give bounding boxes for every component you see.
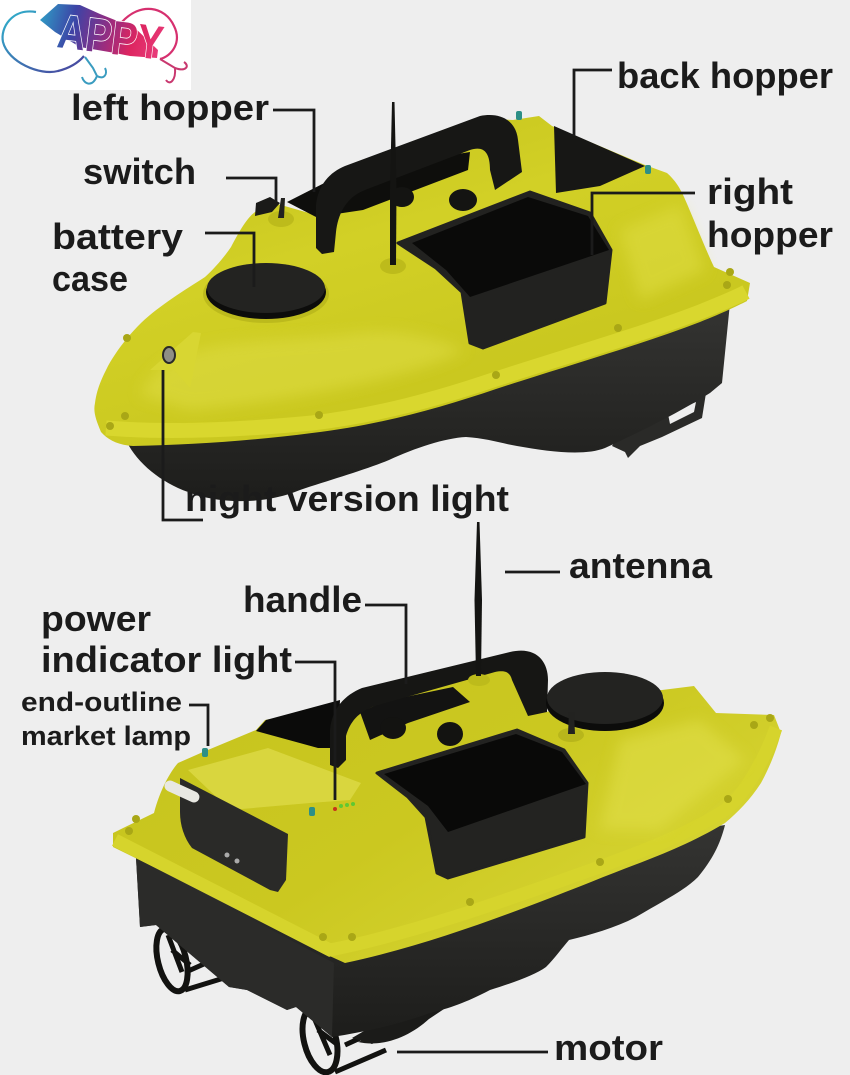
label: right hopper: hopper <box>707 214 833 255</box>
logo: lure body <box>40 4 158 58</box>
label: power indicator light: indicator light <box>41 639 292 680</box>
bottom boat: left hopper <box>256 700 340 748</box>
label: power indicator light: power <box>41 598 151 639</box>
bottom boat: hull <box>136 825 725 1037</box>
label: battery case: case <box>52 258 128 299</box>
bottom boat: switch <box>558 712 584 742</box>
label: left hopper: left hopper <box>71 87 269 128</box>
label: power indicator light <box>41 598 335 800</box>
top boat: hull <box>126 303 730 501</box>
top boat: deck <box>94 116 750 446</box>
bottom boat: left propeller <box>151 926 224 994</box>
top boat: handle <box>316 115 522 254</box>
top boat: rear tab <box>255 197 280 216</box>
top boat: night light fin <box>150 332 201 388</box>
top boat: flange band <box>106 292 746 431</box>
logo: right fishing line <box>122 9 177 59</box>
top boat: knobs <box>390 187 477 211</box>
bottom boat: knobs <box>380 717 463 746</box>
label: right hopper: right <box>707 171 793 212</box>
top boat: motor <box>612 393 706 458</box>
top boat: antenna <box>380 102 406 274</box>
logo: lettering: APPY <box>55 5 166 71</box>
bottom boat: white pipe <box>170 786 194 797</box>
label: switch <box>83 151 276 202</box>
bottom boat: deck <box>113 662 781 963</box>
label: battery case <box>52 216 254 299</box>
bottom boat: hull keel <box>352 996 472 1044</box>
bottom boat: inner compartment <box>360 687 470 740</box>
label: end-outline market lamp: market lamp <box>21 721 191 751</box>
top boat: right hopper <box>398 192 611 348</box>
label: back hopper: back hopper <box>617 55 833 96</box>
logo: left hook <box>82 57 106 84</box>
label: end-outline market lamp <box>21 687 208 751</box>
logo: right hook <box>160 59 187 82</box>
bottom boat: rear well <box>188 748 361 810</box>
top boat <box>94 102 750 501</box>
label: handle <box>243 579 406 684</box>
bottom boat: antenna <box>468 522 490 686</box>
label: battery case: battery <box>52 216 183 257</box>
top boat: screws <box>106 268 734 430</box>
bottom boat: handle <box>330 651 548 768</box>
bottom boat: marker lamps <box>202 748 315 816</box>
top boat: battery case <box>203 263 329 323</box>
top boat: marker lamps <box>516 111 651 174</box>
top boat: stern highlight <box>620 205 705 300</box>
label: switch: switch <box>83 151 196 192</box>
logo: left fishing line <box>3 11 84 72</box>
top boat: deck highlight <box>140 332 465 410</box>
label: left hopper <box>71 87 314 192</box>
bottom boat: battery case <box>546 672 664 731</box>
label: back hopper <box>574 55 833 136</box>
bottom boat: power indicator LEDs <box>333 802 355 811</box>
label: right hopper <box>592 171 833 255</box>
label: night version light: night version light <box>185 478 509 519</box>
label: end-outline market lamp: end-outline <box>21 687 182 717</box>
bottom boat: screws <box>125 714 774 941</box>
top boat: switch <box>268 198 294 227</box>
label: motor: motor <box>554 1027 663 1068</box>
bottom boat: flange band <box>115 728 776 950</box>
top boat: back hopper <box>554 126 645 193</box>
label: night version light <box>163 370 509 520</box>
top boat: left hopper <box>287 152 470 217</box>
bottom boat <box>113 522 781 1075</box>
label: handle: handle <box>243 579 362 620</box>
bottom boat: right hopper <box>377 730 587 878</box>
logo <box>0 0 191 90</box>
bottom boat: hull rear face <box>136 858 334 1037</box>
label: antenna: antenna <box>569 545 713 586</box>
bottom boat: bow highlight <box>600 720 745 830</box>
bottom boat: rear plate <box>180 778 288 892</box>
bottom boat: rear propeller <box>296 1004 400 1075</box>
